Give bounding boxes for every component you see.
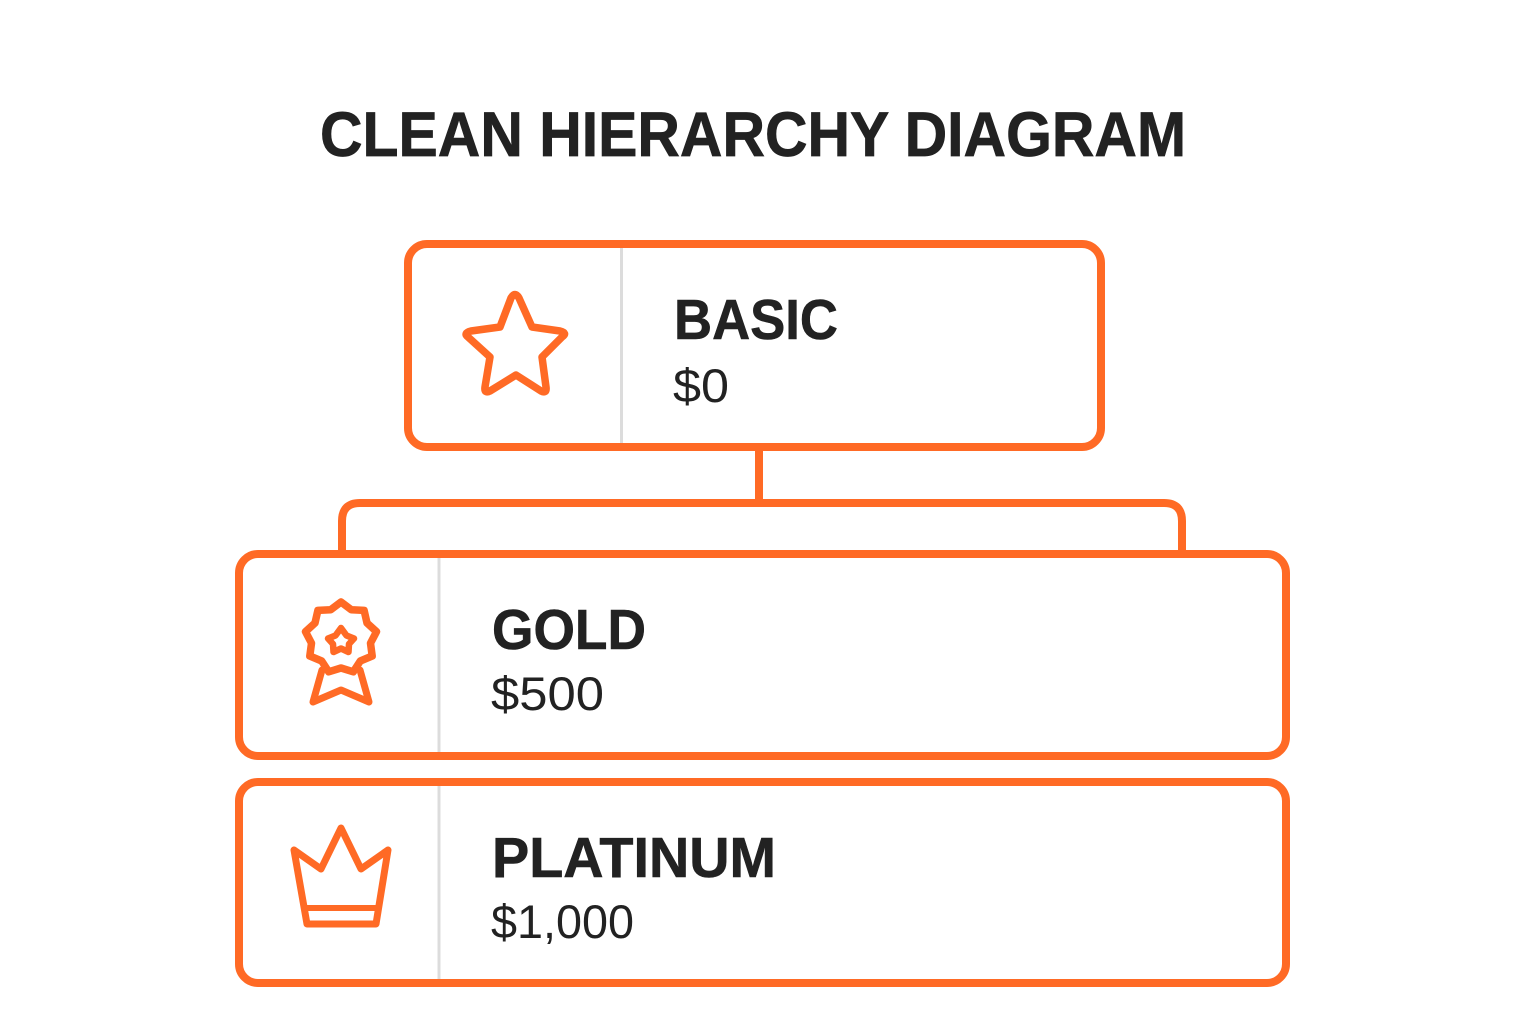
icon: star [466, 294, 565, 392]
icon: crown [294, 828, 388, 924]
tier name: gold: GOLD [492, 598, 646, 662]
price: gold: $500 [491, 667, 604, 720]
tier name: platinum: PLATINUM [492, 826, 776, 890]
panel: platinum tier [239, 782, 1286, 983]
panel: basic tier [408, 244, 1101, 447]
price: platinum: $1,000 [491, 895, 634, 948]
icon: medal [306, 602, 376, 702]
panel: gold tier [239, 554, 1286, 756]
price: basic: $0 [673, 359, 729, 412]
title: CLEAN HIERARCHY DIAGRAM [320, 100, 1186, 170]
tier name: basic: BASIC [674, 288, 838, 352]
connector: basic to lower tiers [342, 450, 1182, 554]
